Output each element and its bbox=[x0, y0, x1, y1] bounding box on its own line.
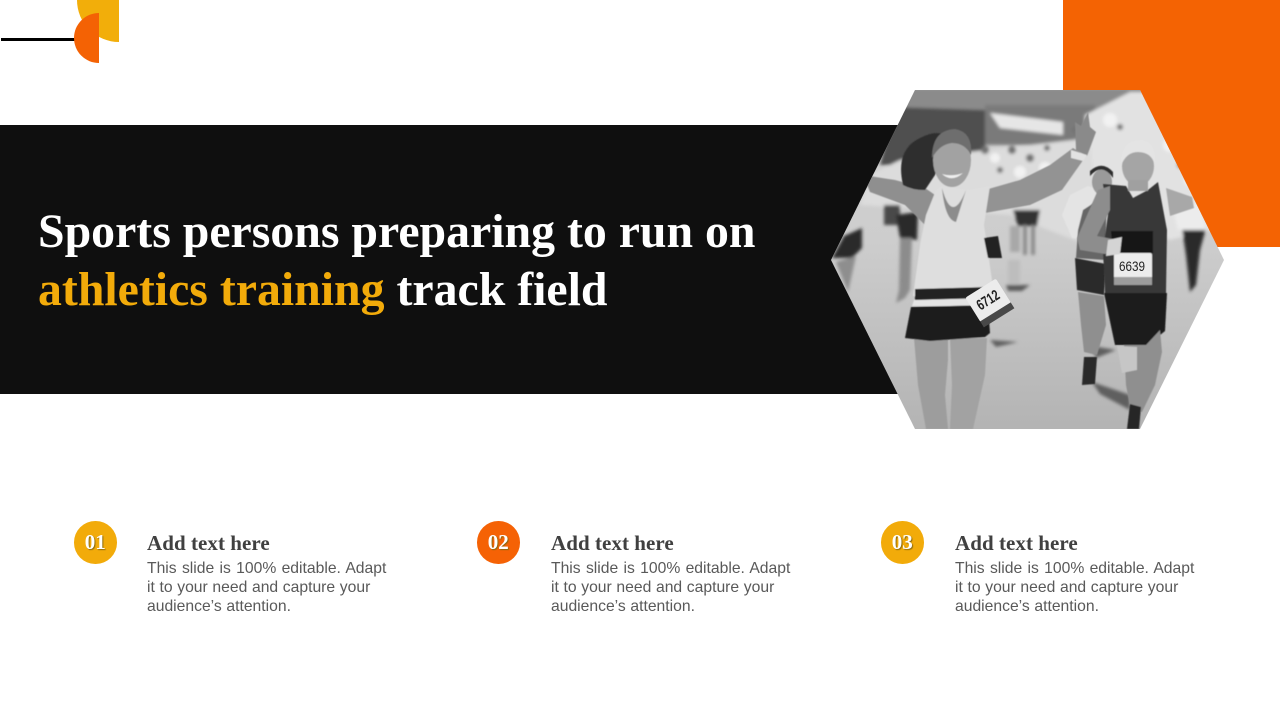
badge 01: 01 bbox=[85, 530, 106, 554]
text block 3: Add text here bbox=[955, 531, 1078, 555]
text block 1: Add text here bbox=[147, 531, 270, 555]
text block 3: audience’s attention. bbox=[955, 598, 1099, 615]
bib: 6712: 6712 bbox=[974, 287, 1003, 314]
text block 3 bbox=[955, 531, 1194, 615]
text block 3: it to your need and capture your bbox=[955, 579, 1178, 596]
runner: white shirt and middle runner bbox=[1072, 165, 1114, 386]
text block 2: audience’s attention. bbox=[551, 598, 695, 615]
text block 2 bbox=[551, 531, 790, 615]
runner: man with bib 6639 bbox=[1077, 140, 1194, 429]
text block 3: This slide is 100% editable. Adapt bbox=[955, 560, 1194, 577]
badge 01 bbox=[74, 521, 116, 564]
title: Sports persons preparing to run on bbox=[38, 205, 756, 258]
text block 2: it to your need and capture your bbox=[551, 579, 774, 596]
ground shadows bbox=[990, 340, 1130, 410]
title banner bbox=[0, 125, 930, 394]
badge 02 bbox=[477, 521, 520, 564]
photo: runners in a hexagon bbox=[831, 90, 1224, 429]
text block 2: Add text here bbox=[551, 531, 674, 555]
badge 02: 02 bbox=[488, 530, 509, 554]
text block 1: audience’s attention. bbox=[147, 598, 291, 615]
title bbox=[38, 205, 756, 316]
title: athletics training track field bbox=[38, 262, 608, 316]
text block 2: This slide is 100% editable. Adapt bbox=[551, 560, 790, 577]
text block 1: This slide is 100% editable. Adapt bbox=[147, 560, 386, 577]
background runners bbox=[1013, 210, 1040, 226]
badge 03: 03 bbox=[892, 530, 913, 554]
decoration: orange corner block bbox=[1063, 0, 1280, 247]
bib: 6639: 6639 bbox=[1119, 258, 1145, 274]
text block 1 bbox=[147, 531, 386, 615]
decoration: top-left shapes and line bbox=[1, 0, 119, 63]
bib: 6712 bbox=[965, 279, 1014, 327]
badge 03 bbox=[881, 521, 924, 564]
text block 1: it to your need and capture your bbox=[147, 579, 370, 596]
runner: woman with bib 6712 bbox=[863, 112, 1096, 429]
